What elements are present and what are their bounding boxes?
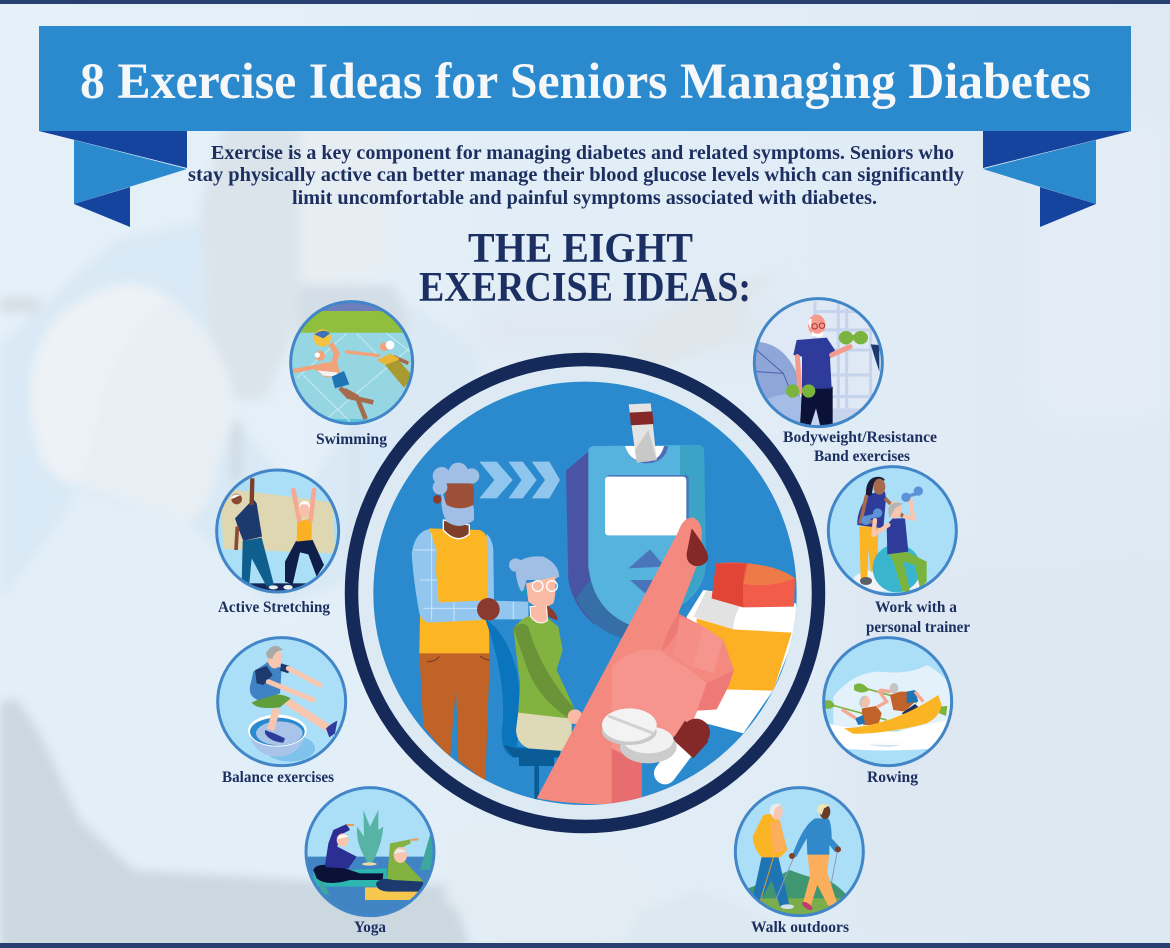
top bar <box>0 0 1170 4</box>
icon: balance bowl <box>217 637 347 767</box>
icon: man with dumbbells <box>756 302 880 425</box>
icon: hand with blood drop <box>537 518 734 804</box>
icon: senior woman seated <box>509 556 582 752</box>
icon: pill bottle <box>687 562 796 733</box>
intro text: Exercise is a key component for managing diabetes and related symptoms. Seniors who <box>211 142 954 164</box>
section heading <box>419 226 751 311</box>
label: Work with a <box>875 599 957 616</box>
section heading: EXERCISE IDEAS: <box>419 265 751 311</box>
title banner <box>39 26 1131 131</box>
intro text: stay physically active can better manage their blood glucose levels which can significantly <box>188 164 964 186</box>
icon: nordic walkers <box>736 789 862 914</box>
exercise: bodyweight / resistance <box>753 297 937 446</box>
exercise: walk outdoors <box>733 787 865 936</box>
exercise: yoga <box>305 787 435 936</box>
icon: swimmers <box>292 303 412 422</box>
icon: kayakers <box>825 639 950 764</box>
label: Balance exercises <box>222 769 334 786</box>
icon: pills <box>602 708 710 773</box>
bottom bar <box>0 943 1170 948</box>
ribbon: left fold <box>39 131 187 227</box>
exercise: swimming <box>287 298 417 448</box>
label: Active Stretching <box>218 599 330 616</box>
label: second line: Band exercises <box>814 448 910 465</box>
label: Walk outdoors <box>751 919 849 936</box>
label: Rowing <box>867 769 918 786</box>
icon: trainer and client <box>827 465 958 597</box>
central illustration: glucose testing <box>352 360 818 826</box>
label: Swimming <box>316 431 387 448</box>
icon: chevrons <box>479 462 560 498</box>
icon: chair <box>485 618 560 799</box>
icon: stretching pair <box>218 472 338 590</box>
icon: yoga pair <box>305 787 435 917</box>
exercise: personal trainer <box>827 465 958 616</box>
intro text: limit uncomfortable and painful symptoms associated with diabetes. <box>292 187 877 209</box>
exercise: active stretching <box>213 467 343 616</box>
exercise: balance <box>217 637 347 786</box>
exercise: rowing <box>822 637 955 786</box>
ribbon: right fold <box>983 131 1131 227</box>
label: second line: personal trainer <box>866 619 970 636</box>
icon: senior man standing <box>412 463 528 782</box>
title: 8 Exercise Ideas for Seniors Managing Diabetes <box>80 54 1091 110</box>
section heading: THE EIGHT <box>468 226 693 272</box>
label: Yoga <box>354 919 386 936</box>
intro text <box>188 142 964 209</box>
icon: glucose meter <box>566 403 706 640</box>
label: Bodyweight/Resistance <box>783 429 937 446</box>
